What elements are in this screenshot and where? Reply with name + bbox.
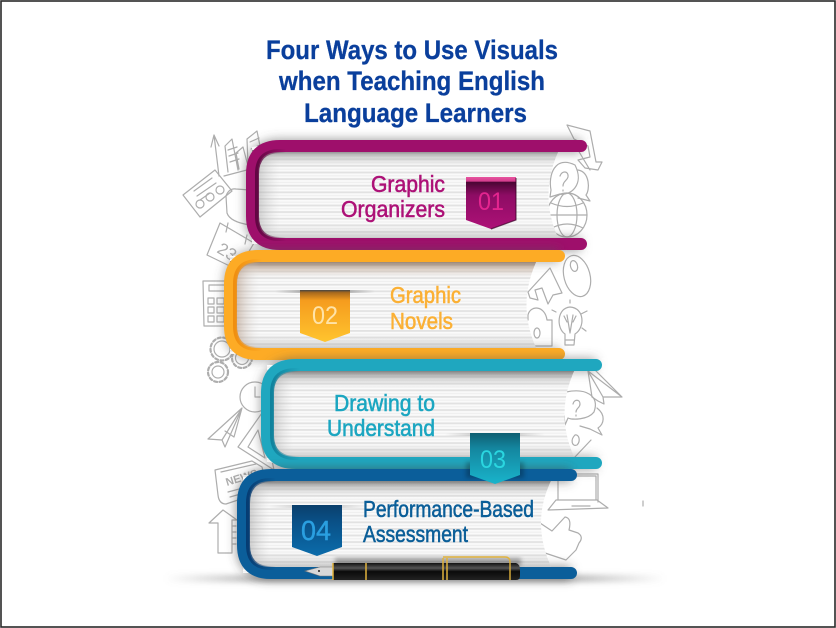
book 3: Drawing to Understand	[267, 362, 596, 467]
ground shadow	[165, 575, 665, 582]
pages	[243, 475, 554, 573]
label: Assessment	[363, 521, 469, 547]
icon: paper plane	[208, 408, 242, 447]
cover	[230, 256, 559, 354]
nib	[305, 567, 333, 576]
icon: laptop	[548, 474, 608, 510]
badge 03: 03	[480, 446, 506, 474]
cover inner tone and highlights	[272, 370, 304, 458]
label: Organizers	[341, 196, 445, 222]
page shading	[230, 260, 550, 350]
badge 01	[466, 177, 516, 229]
cover shadow	[267, 365, 596, 463]
icon: graduation cap	[567, 125, 602, 170]
icon: newspaper: NEWS	[224, 468, 259, 489]
book 2: Graphic Novels	[230, 253, 559, 358]
book 4: Performance-Based Assessment	[243, 472, 571, 573]
icon: up arrow	[209, 510, 237, 553]
barrel	[333, 563, 520, 580]
icon: set square	[238, 413, 274, 470]
cover	[267, 365, 596, 463]
title: Language Learners	[304, 98, 527, 128]
pen shadow	[335, 558, 521, 566]
badge 03	[445, 433, 545, 484]
icon: small tick mark	[642, 501, 644, 506]
icon: paper plane right	[588, 370, 622, 404]
icon: light bulb	[552, 300, 587, 345]
pages	[230, 256, 539, 354]
cover shadow	[252, 146, 581, 244]
badge 02	[275, 290, 375, 342]
badge 01: 01	[478, 188, 504, 216]
icon: speech bubbles right	[561, 391, 603, 435]
icon: newspaper	[215, 461, 268, 504]
icon: house	[528, 268, 562, 304]
icon: radio device	[183, 170, 232, 217]
badge 04: 04	[301, 515, 331, 546]
title: Four Ways to Use Visuals	[266, 35, 558, 65]
pages	[267, 365, 577, 463]
icon: thumbs up	[540, 517, 581, 560]
label: Understand	[327, 415, 435, 441]
cover inner tone and highlights	[235, 261, 266, 349]
cover inner tone and highlights	[248, 480, 279, 568]
icons: right doodles	[528, 125, 643, 560]
icon: calendar	[207, 223, 254, 270]
page shading	[267, 370, 587, 458]
page shading	[252, 150, 572, 240]
icon: bar chart	[211, 131, 262, 176]
cover inner tone and highlights	[257, 151, 288, 239]
fountain pen	[305, 557, 521, 580]
label: Graphic	[371, 171, 445, 197]
icon: speech bubble with question	[550, 162, 590, 201]
label: Novels	[390, 308, 453, 334]
icon: percent sign	[572, 435, 591, 458]
badge 02: 02	[312, 302, 338, 330]
label: Performance-Based	[363, 496, 534, 522]
label	[363, 496, 534, 547]
title	[266, 35, 558, 128]
pages	[252, 146, 561, 244]
cover shadow	[243, 475, 571, 573]
label	[341, 171, 445, 222]
icon: calendar: 23	[214, 239, 240, 265]
cover	[252, 146, 581, 244]
title: when Teaching English	[278, 66, 545, 96]
badge 04	[268, 505, 368, 556]
label	[390, 282, 461, 334]
icon: padlock	[528, 308, 552, 346]
page shading	[243, 480, 563, 568]
icons: left doodles	[183, 131, 274, 553]
book 1: Graphic Organizers	[252, 143, 581, 247]
icon: gears	[208, 338, 252, 382]
cover	[243, 475, 571, 573]
icon: globe	[547, 193, 587, 237]
icon: computer mouse	[559, 252, 595, 300]
clip and gold bands	[333, 558, 447, 580]
label: Drawing to	[334, 390, 435, 416]
icon: rounded note	[226, 189, 250, 225]
label	[327, 390, 435, 441]
cover shadow	[230, 256, 559, 354]
icon: clock	[240, 382, 270, 412]
icon: calculator	[203, 281, 227, 326]
label: Graphic	[390, 282, 461, 308]
